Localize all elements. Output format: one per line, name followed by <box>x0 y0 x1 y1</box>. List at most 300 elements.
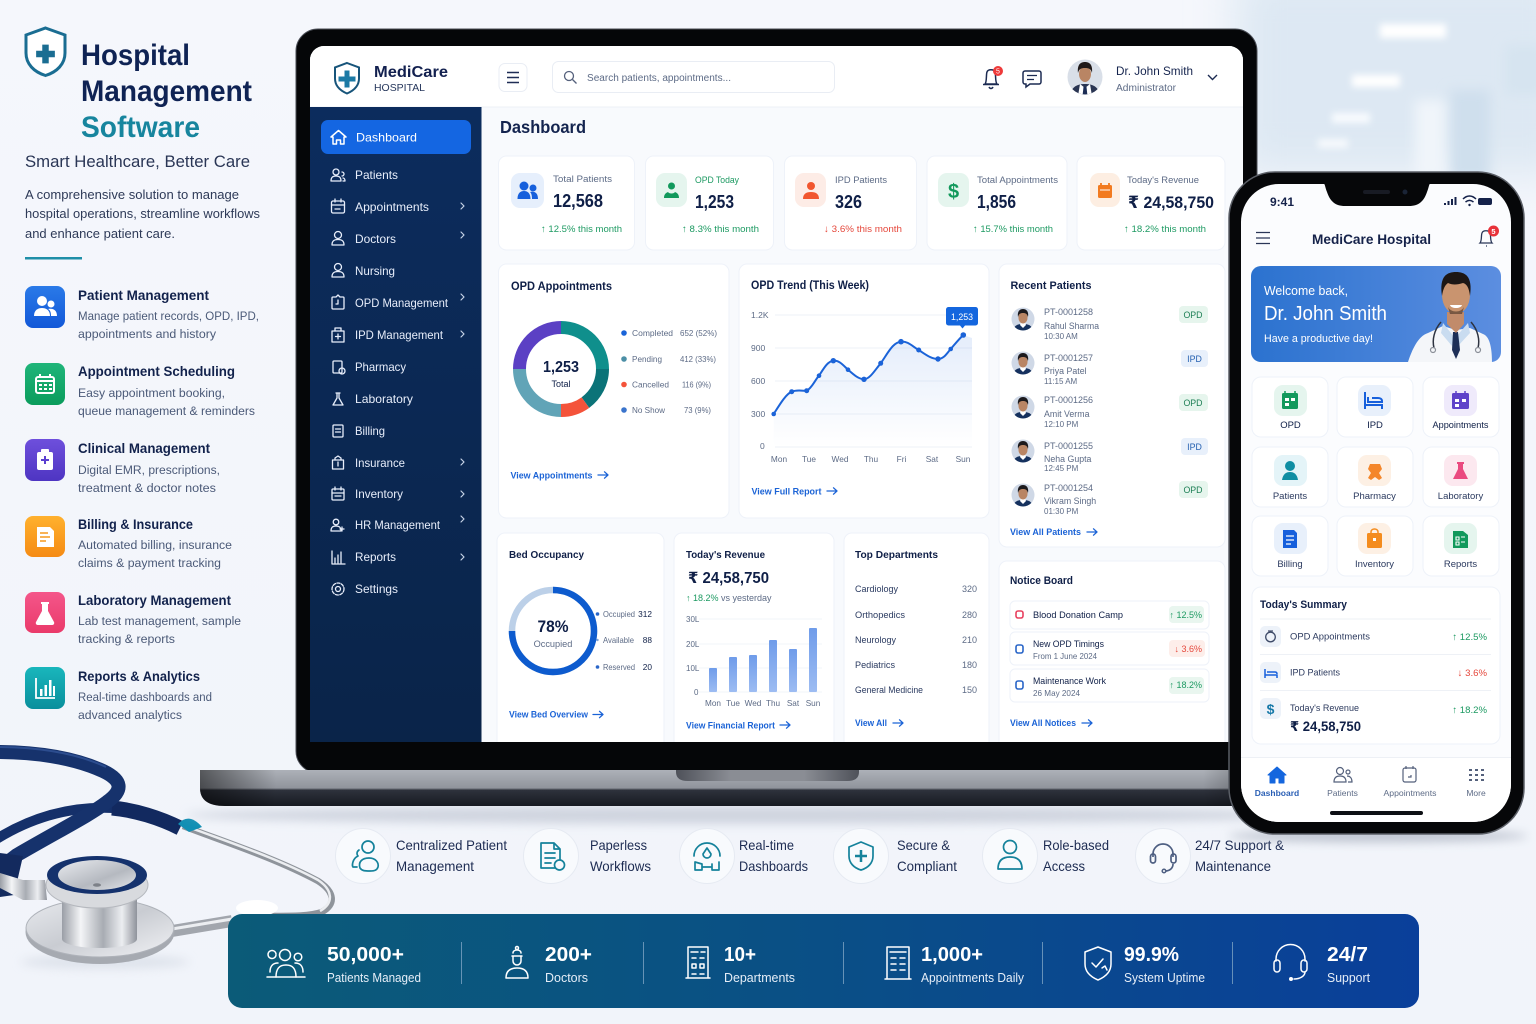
stat card: opd today: OPD Today <box>695 175 739 186</box>
panel: opd trend chart: 0 <box>760 441 765 451</box>
welcome card: Have a productive day! <box>1264 333 1373 345</box>
doctor photo <box>1408 272 1492 362</box>
stat card: total appointments: $ <box>948 181 959 203</box>
patient row <box>1011 306 1208 341</box>
stat: support: Support <box>1327 971 1370 985</box>
panel: today's revenue: ₹ 24,58,750 <box>688 570 769 587</box>
feature: clinical management: Clinical Management <box>78 440 210 456</box>
patient row: Amit Verma <box>1044 409 1090 419</box>
panel: today's revenue: 20L <box>686 640 700 649</box>
patient row: PT-0001255 <box>1044 441 1093 451</box>
description <box>25 187 260 241</box>
panel: opd trend chart: 900 <box>751 343 765 353</box>
stat: patients managed: 50,000+ <box>327 943 404 966</box>
feature: laboratory management: tracking & reports <box>78 632 175 646</box>
feature: patient management: Patient Management <box>78 287 209 303</box>
user name <box>1116 66 1192 91</box>
panel: today's revenue: 30L <box>686 615 700 624</box>
benefit: secure and compliant: Compliant <box>897 858 957 874</box>
summary row: ↓ 3.6% <box>1458 668 1487 679</box>
nav: ipd management: IPD Management <box>355 328 444 342</box>
panel: opd trend chart: OPD Trend (This Week) <box>751 280 869 292</box>
panel: today's revenue: Tue <box>726 699 740 708</box>
donut legend: 652 (52%) <box>680 328 717 338</box>
stat card: opd today: ↑ 8.3% this month <box>682 224 759 235</box>
panel: opd trend chart: Tue <box>802 454 816 464</box>
stethoscope illustration <box>0 747 332 969</box>
donut legend: 412 (33%) <box>680 354 716 364</box>
panel: top departments: 320 <box>962 584 977 594</box>
status bar: 9:41 <box>1270 195 1294 209</box>
stat card: total patients: Total Patients <box>553 174 612 185</box>
logo: MediCare <box>374 64 448 81</box>
feature: clinical management: Digital EMR, prescriptions, <box>78 463 220 477</box>
stat: patients managed <box>267 943 421 985</box>
summary row: IPD Patients <box>1290 668 1340 678</box>
panel: top departments <box>844 533 989 753</box>
donut legend <box>621 328 717 415</box>
tooltip <box>946 307 978 328</box>
panel: top departments: View All <box>855 717 887 728</box>
search bar: Search patients, appointments... <box>587 73 731 84</box>
feature: reports and analytics: Real-time dashboards and <box>78 690 212 704</box>
stat: departments: Departments <box>724 971 795 985</box>
notice item <box>1010 669 1209 702</box>
stat card: ipd patients: ↓ 3.6% this month <box>824 224 902 235</box>
panel: today's revenue: Wed <box>745 699 762 708</box>
app tile: patients: Patients <box>1273 491 1307 502</box>
status bar <box>1270 190 1492 209</box>
stat card: ipd patients: 326 <box>835 192 862 212</box>
panel: top departments: 180 <box>962 660 977 670</box>
app header <box>310 46 1243 108</box>
panel: opd trend chart: 1.2K <box>751 310 769 320</box>
summary row: OPD Appointments <box>1290 632 1370 642</box>
panel: opd trend chart: Mon <box>771 454 787 464</box>
benefit: centralized patient management: Centralized Patient <box>396 837 507 853</box>
panel: bed occupancy: 20 <box>643 662 652 672</box>
panel: today's revenue: View Financial Report <box>686 720 775 730</box>
stat card: opd today: 1,253 <box>695 192 734 212</box>
nav: patients: Patients <box>1327 788 1358 798</box>
app tile: pharmacy: Pharmacy <box>1353 491 1396 502</box>
icon: notification bell <box>983 66 1003 88</box>
panel: bed occupancy: 312 <box>638 609 652 619</box>
feature: laboratory management <box>25 592 241 646</box>
patient row: 12:10 PM <box>1044 420 1079 429</box>
panel: opd trend chart: Thu <box>864 454 879 464</box>
notice item: New OPD Timings <box>1033 639 1104 649</box>
patient row: PT-0001257 <box>1044 353 1093 363</box>
laptop base <box>185 770 1305 824</box>
app tile: inventory <box>1337 516 1413 576</box>
patient row: Rahul Sharma <box>1044 321 1099 331</box>
patient row: 12:45 PM <box>1044 464 1079 473</box>
nav: settings: Settings <box>355 582 398 596</box>
feature list <box>25 286 259 722</box>
phone <box>1228 172 1528 842</box>
stat card: today's revenue: ↑ 18.2% this month <box>1124 224 1206 235</box>
donut legend: No Show <box>632 405 666 415</box>
benefit: centralized patient management: Management <box>396 858 474 874</box>
notice item: ↑ 12.5% <box>1169 610 1202 620</box>
patient row <box>1011 350 1208 386</box>
patient row: 01:30 PM <box>1044 507 1079 516</box>
stat card: opd today <box>646 156 774 250</box>
app tile: laboratory: Laboratory <box>1438 491 1483 502</box>
nav: settings <box>332 582 398 596</box>
patient row: IPD <box>1187 442 1202 452</box>
panel: opd trend chart: Fri <box>897 454 906 464</box>
stat: appointments daily <box>885 943 1025 985</box>
panel: notice board: View All Notices <box>1010 717 1076 728</box>
donut chart <box>520 328 602 411</box>
feature: reports and analytics: Reports & Analytics <box>78 668 200 684</box>
panel: top departments: 150 <box>962 685 977 695</box>
summary row: $ <box>1267 701 1275 717</box>
app tile: appointments: Appointments <box>1432 420 1489 431</box>
description: hospital operations, streamline workflows <box>25 206 260 221</box>
patient row: PT-0001256 <box>1044 395 1093 405</box>
bottom nav <box>1241 758 1511 822</box>
benefit: secure and compliant: Secure & <box>897 837 951 853</box>
panel: top departments: Neurology <box>855 635 896 645</box>
patient row: 10:30 AM <box>1044 332 1078 341</box>
stat: departments <box>686 943 795 985</box>
welcome card: Welcome back, <box>1264 284 1348 298</box>
donut legend: 73 (9%) <box>684 405 711 415</box>
heading <box>81 39 252 144</box>
feature: reports and analytics: advanced analytics <box>78 708 182 722</box>
active nav item <box>321 120 471 154</box>
app tile: opd <box>1252 377 1328 437</box>
benefit: role-based access <box>982 828 1109 884</box>
active nav item: Dashboard <box>356 130 417 144</box>
app tile: patients <box>1252 447 1328 507</box>
benefit: support and maintenance: 24/7 Support & <box>1195 837 1285 853</box>
patient row <box>1011 481 1208 516</box>
phone body <box>1228 830 1528 842</box>
notice item: From 1 June 2024 <box>1033 651 1097 661</box>
laptop bezel <box>296 29 1257 773</box>
benefits row <box>336 828 1285 884</box>
laptop <box>185 29 1305 824</box>
app tile: billing <box>1252 516 1328 576</box>
patient row: Vikram Singh <box>1044 496 1096 506</box>
stat: doctors <box>506 943 592 985</box>
description: and enhance patient care. <box>25 226 175 241</box>
feature: appointment scheduling: Appointment Scheduling <box>78 363 235 379</box>
panel: notice board: Notice Board <box>1010 575 1073 587</box>
panel: today's revenue: ↑ 18.2% vs yesterday <box>686 593 772 603</box>
stat: appointments daily: Appointments Daily <box>921 971 1025 985</box>
panel: opd trend chart: Sun <box>956 454 971 464</box>
bar chart <box>709 628 817 692</box>
stat: support <box>1274 943 1370 985</box>
heading: Software <box>81 111 200 144</box>
description: A comprehensive solution to manage <box>25 187 239 202</box>
welcome card <box>1251 266 1501 362</box>
panel: bed occupancy: Bed Occupancy <box>509 549 584 561</box>
donut legend: Completed <box>632 328 673 338</box>
panel: recent patients: View All Patients <box>1010 526 1081 537</box>
donut chart: Total <box>552 379 571 389</box>
nav: more <box>1466 769 1486 798</box>
notice item: 26 May 2024 <box>1033 688 1080 698</box>
benefit: role-based access: Access <box>1043 858 1085 874</box>
notice item: Blood Donation Camp <box>1033 610 1123 620</box>
patient row: Priya Patel <box>1044 366 1087 376</box>
feature: patient management: appointments and history <box>78 327 217 341</box>
title block <box>25 28 260 260</box>
nav: inventory <box>332 487 464 501</box>
panel: notice board <box>999 561 1225 751</box>
benefit: paperless workflows: Workflows <box>590 858 651 874</box>
panel: top departments: Cardiology <box>855 584 898 594</box>
feature: patient management <box>25 286 259 341</box>
patient row: Neha Gupta <box>1044 454 1092 464</box>
nav: dashboard <box>1255 767 1299 798</box>
app bar: 5 <box>1491 227 1496 236</box>
laptop screen <box>310 46 1243 753</box>
feature: appointment scheduling: Easy appointment booking, <box>78 386 225 400</box>
panel: bed occupancy: 88 <box>643 635 652 645</box>
panel: opd appointments: View Appointments <box>510 470 592 480</box>
summary row <box>1260 662 1487 683</box>
feature: billing and insurance: Billing & Insurance <box>78 516 193 532</box>
user name: Administrator <box>1116 83 1177 94</box>
panel: top departments: Top Departments <box>855 549 938 561</box>
benefit: real-time dashboards <box>680 828 808 884</box>
sidebar <box>310 107 482 742</box>
heading: Hospital <box>81 39 190 72</box>
benefit: real-time dashboards: Real-time <box>739 837 794 853</box>
search bar <box>552 62 834 92</box>
nav: more: More <box>1466 788 1486 798</box>
stat: doctors: Doctors <box>545 971 588 985</box>
patient row: 11:15 AM <box>1044 377 1078 386</box>
app tile: laboratory <box>1423 447 1499 507</box>
benefit: support and maintenance: Maintenance <box>1195 858 1271 874</box>
nav: nursing <box>332 264 395 278</box>
panel: opd trend chart: View Full Report <box>752 486 822 496</box>
donut chart: 1,253 <box>543 359 579 376</box>
stat: support: 24/7 <box>1327 943 1368 966</box>
stat card: total patients <box>498 156 634 250</box>
panel: today's revenue: Sun <box>806 699 821 708</box>
app tile: ipd <box>1337 377 1413 437</box>
nav: hr management: HR Management <box>355 518 441 532</box>
app tile: opd: OPD <box>1280 420 1301 431</box>
panel: opd trend chart: 600 <box>751 376 765 386</box>
stat card: today's revenue: ₹ 24,58,750 <box>1128 193 1214 212</box>
icon: messages <box>1023 71 1041 87</box>
panel: bed occupancy: Occupied <box>603 609 635 619</box>
stat: system uptime: 99.9% <box>1124 943 1179 966</box>
tagline: Smart Healthcare, Better Care <box>25 153 250 171</box>
stat card: ipd patients <box>784 156 916 250</box>
nav: appointments <box>332 199 464 214</box>
panel: opd trend chart <box>739 264 989 518</box>
stat: system uptime: System Uptime <box>1124 971 1205 985</box>
panel: today's revenue: Sat <box>787 699 800 708</box>
donut legend: 116 (9%) <box>682 380 711 390</box>
stat card: total patients: ↑ 12.5% this month <box>541 224 622 235</box>
panel: today's revenue: Today's Revenue <box>686 549 765 561</box>
nav: opd management: OPD Management <box>355 296 449 310</box>
feature: clinical management <box>25 439 220 495</box>
user avatar <box>1067 59 1103 96</box>
stat: system uptime <box>1085 943 1205 985</box>
app bar: MediCare Hospital <box>1312 231 1431 247</box>
stat: doctors: 200+ <box>545 943 592 966</box>
nav: billing <box>333 424 385 438</box>
icon: notification bell: 5 <box>996 68 1000 76</box>
feature: patient management: Manage patient records, OPD, IPD, <box>78 309 259 323</box>
patient row <box>1011 438 1208 473</box>
notice item <box>1010 601 1209 629</box>
nav: doctors: Doctors <box>355 232 396 246</box>
app tile: reports <box>1423 516 1499 576</box>
benefit: paperless workflows <box>524 828 651 884</box>
stat: patients managed: Patients Managed <box>327 971 421 985</box>
nav: hr management <box>331 516 464 532</box>
stat card: total appointments: ↑ 15.7% this month <box>973 224 1053 235</box>
nav: pharmacy <box>333 360 406 374</box>
stat: appointments daily: 1,000+ <box>921 943 983 966</box>
panel: bed occupancy: Occupied <box>534 639 572 649</box>
donut legend: Pending <box>632 354 662 364</box>
feature: appointment scheduling: queue management & reminders <box>78 404 255 418</box>
nav: reports: Reports <box>355 550 396 564</box>
panel: top departments: 210 <box>962 635 977 645</box>
summary row: Today's Revenue <box>1290 703 1359 714</box>
nav: pharmacy: Pharmacy <box>355 360 406 374</box>
heading: Management <box>81 75 252 108</box>
nav: doctors <box>332 232 464 246</box>
nav: appointments <box>1384 766 1436 798</box>
panel: top departments: Pediatrics <box>855 660 896 670</box>
statistics banner <box>228 914 1419 1008</box>
summary row <box>1260 626 1487 647</box>
app tile: pharmacy <box>1337 447 1413 507</box>
feature: billing and insurance: Automated billing, insurance <box>78 538 232 552</box>
nav: dashboard: Dashboard <box>1255 788 1299 798</box>
welcome card: Dr. John Smith <box>1264 303 1387 325</box>
benefit: secure and compliant <box>834 828 957 884</box>
today's summary: Today's Summary <box>1260 599 1347 611</box>
patient row <box>1011 394 1208 429</box>
panel: recent patients: Recent Patients <box>1010 280 1092 292</box>
summary row: ₹ 24,58,750 <box>1290 719 1361 734</box>
menu button <box>499 64 527 92</box>
panel: bed occupancy <box>497 533 664 753</box>
patient row: PT-0001254 <box>1044 483 1093 493</box>
panel: today's revenue: 0 <box>694 688 699 697</box>
benefit: support and maintenance <box>1136 828 1285 884</box>
panel: top departments: 280 <box>962 610 977 620</box>
nav: appointments: Appointments <box>1384 788 1436 798</box>
notice item: Maintenance Work <box>1033 676 1106 686</box>
icon: shield logo <box>26 28 65 76</box>
patient row: OPD <box>1183 310 1203 320</box>
stat card: today's revenue <box>1077 156 1225 250</box>
patient row: IPD <box>1187 354 1202 364</box>
panel: today's revenue <box>674 533 834 753</box>
app tile: ipd: IPD <box>1367 420 1383 431</box>
nav: patients: Patients <box>355 168 398 182</box>
tooltip: 1,253 <box>951 312 973 322</box>
notice item: ↓ 3.6% <box>1174 644 1202 654</box>
app tile: appointments <box>1423 377 1499 437</box>
panel: bed occupancy: Reserved <box>603 662 635 672</box>
notice item <box>1010 632 1209 665</box>
logo: HOSPITAL <box>374 82 425 94</box>
panel: bed occupancy: View Bed Overview <box>509 708 589 720</box>
app tile: reports: Reports <box>1444 559 1477 570</box>
stat card: ipd patients: IPD Patients <box>835 175 887 186</box>
panel: recent patients <box>999 264 1225 547</box>
feature: laboratory management: Laboratory Management <box>78 592 231 608</box>
feature: appointment scheduling <box>25 363 255 418</box>
patient row: OPD <box>1183 485 1203 495</box>
feature: billing and insurance <box>25 516 232 570</box>
panel: top departments: General Medicine <box>855 685 923 695</box>
benefit: real-time dashboards: Dashboards <box>739 858 808 874</box>
app tile: billing: Billing <box>1277 559 1303 570</box>
summary row <box>1260 698 1487 734</box>
benefit: centralized patient management <box>336 828 507 884</box>
summary row: ↑ 12.5% <box>1452 632 1487 643</box>
benefit: role-based access: Role-based <box>1043 837 1109 853</box>
patient row: OPD <box>1183 398 1203 408</box>
panel: opd appointments <box>498 264 729 518</box>
panel: opd trend chart: Sat <box>926 454 939 464</box>
panel: today's revenue: 10L <box>686 664 700 673</box>
nav: nursing: Nursing <box>355 264 395 278</box>
nav: reports <box>332 550 464 564</box>
panel: opd trend chart: Wed <box>832 454 849 464</box>
nav: opd management <box>332 294 464 310</box>
panel: opd appointments: OPD Appointments <box>511 281 612 293</box>
stat card: total appointments: Total Appointments <box>977 175 1058 186</box>
panel: top departments: Orthopedics <box>855 610 906 620</box>
stat card: total patients: 12,568 <box>553 191 603 211</box>
panel: bed occupancy: 78% <box>538 618 569 636</box>
app tile: inventory: Inventory <box>1355 559 1394 570</box>
today's summary <box>1252 587 1500 744</box>
feature: reports and analytics <box>25 667 212 722</box>
nav: inventory: Inventory <box>355 487 403 501</box>
summary row: ↑ 18.2% <box>1452 705 1487 716</box>
feature: clinical management: treatment & doctor notes <box>78 481 216 495</box>
stat card: total appointments: 1,856 <box>977 192 1016 212</box>
feature: billing and insurance: claims & payment tracking <box>78 556 221 570</box>
patient row: PT-0001258 <box>1044 307 1093 317</box>
nav: insurance <box>332 456 464 470</box>
nav: appointments: Appointments <box>355 200 429 214</box>
nav: insurance: Insurance <box>355 456 405 470</box>
notice item: ↑ 18.2% <box>1169 680 1202 690</box>
donut legend: Cancelled <box>632 380 669 390</box>
stat card: total appointments <box>927 156 1067 250</box>
nav: patients <box>331 168 398 182</box>
panel: bed occupancy: Available <box>603 635 634 645</box>
panel: today's revenue: Mon <box>705 699 721 708</box>
feature: laboratory management: Lab test management, sample <box>78 614 241 628</box>
nav: billing: Billing <box>355 424 385 438</box>
page heading: Dashboard <box>500 117 586 137</box>
